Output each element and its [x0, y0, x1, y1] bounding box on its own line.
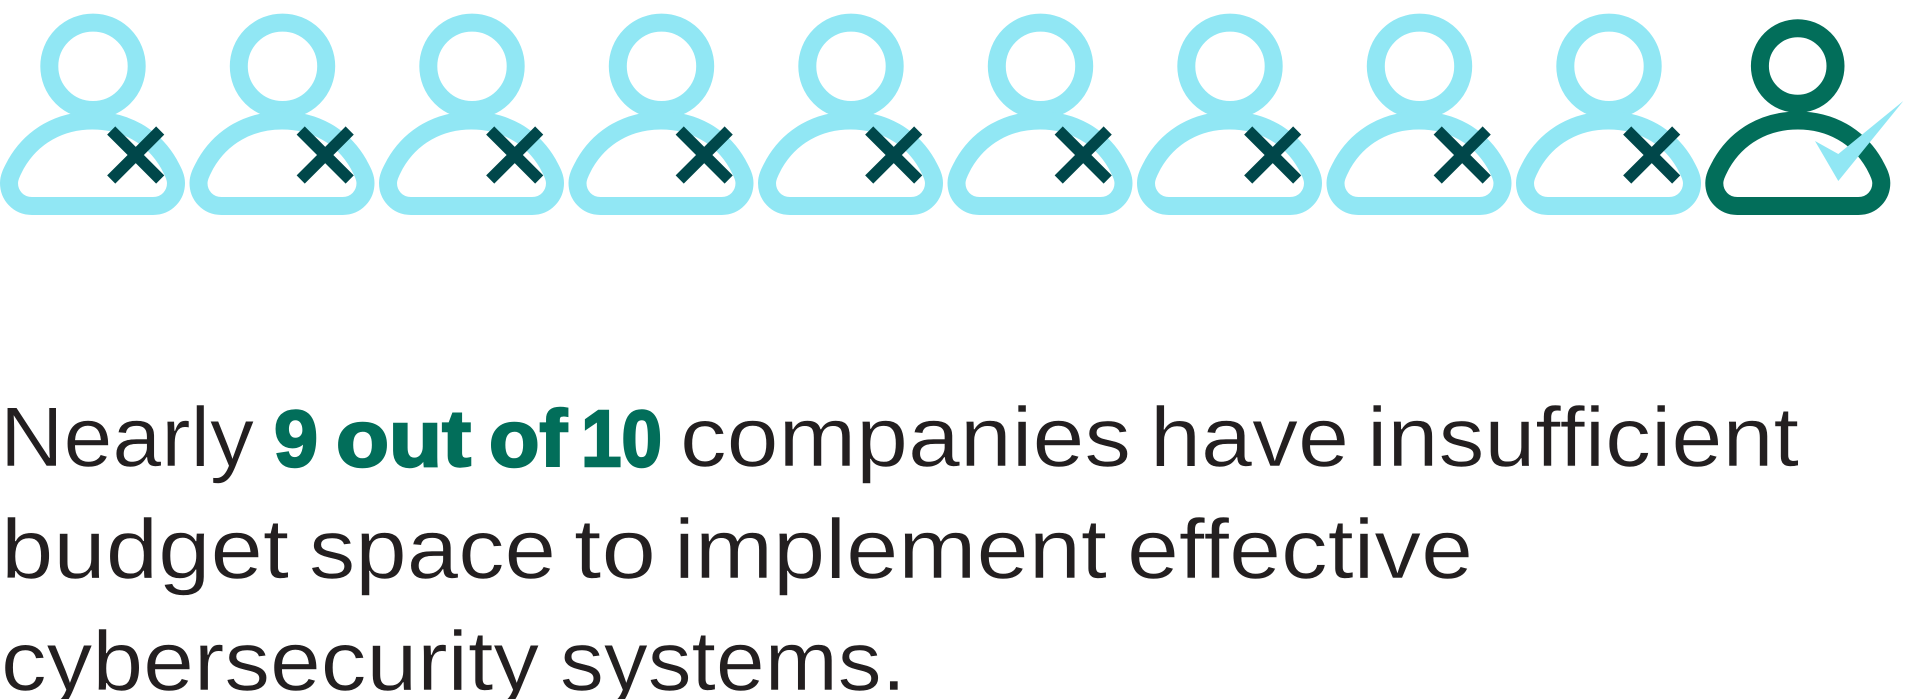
statement text: [0, 390, 1799, 699]
person 4 with cross: [578, 23, 744, 206]
line 2: space: [309, 502, 556, 596]
person 6 with cross: [956, 23, 1124, 206]
person 1 with cross: [9, 23, 176, 206]
line 1: Nearly: [0, 390, 254, 484]
line 1: [0, 390, 1799, 484]
line 1: have: [1150, 390, 1349, 484]
line 2: [1, 502, 1473, 596]
person 2 with cross: [198, 23, 366, 206]
person 10 with check mark: [1714, 28, 1903, 206]
line 1: out: [336, 394, 471, 483]
person 5 with cross: [767, 23, 934, 206]
person 7 with cross: [1146, 23, 1313, 206]
line 2: effective: [1127, 502, 1473, 596]
pictogram row: ten people: [9, 23, 1903, 206]
line 2: budget: [1, 502, 289, 596]
person 8 with cross: [1336, 23, 1502, 206]
line 1: 10: [581, 394, 662, 483]
person 3 with cross: [388, 23, 555, 206]
person 9 with cross: [1525, 23, 1692, 206]
line 1: of: [489, 394, 567, 483]
line 2: to: [574, 502, 656, 596]
line 1: insufficient: [1367, 390, 1799, 484]
line 1: companies: [680, 390, 1131, 484]
line 2: implement: [674, 502, 1107, 596]
line 3: [1, 614, 906, 699]
line 1: 9: [274, 394, 318, 483]
